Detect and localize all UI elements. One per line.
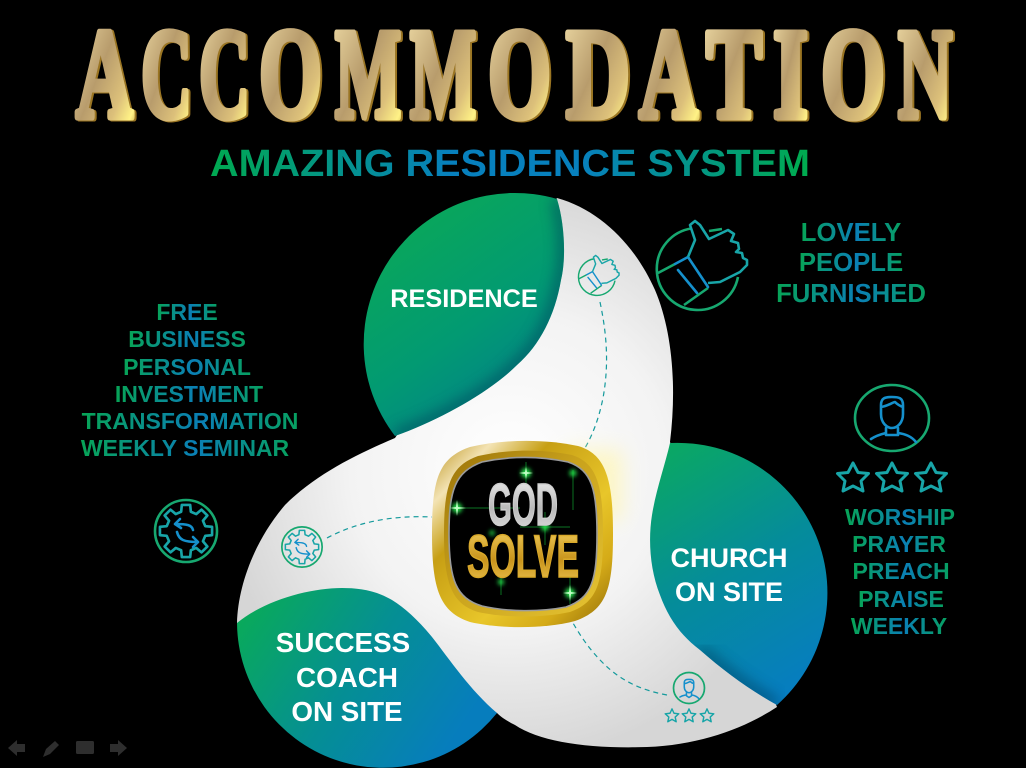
badge: god solve: SOLVE: [467, 523, 579, 590]
title: C: [141, 3, 192, 145]
icon: large person: [855, 385, 929, 451]
text block: free seminar list: WEEKLY SEMINAR: [81, 435, 290, 461]
title: A: [76, 3, 133, 145]
panel: success coach on site: [237, 588, 497, 768]
badge: god solve: GOD: [488, 472, 558, 538]
text block: worship list: PRAYER: [852, 531, 946, 557]
icon: menu box: [76, 741, 94, 754]
title: A: [639, 3, 698, 145]
text block: lovely people furnished: FURNISHED: [776, 280, 926, 308]
panel: success coach on site: SUCCESS: [276, 627, 410, 658]
title: O: [821, 3, 885, 145]
panel: church on site: CHURCH: [670, 543, 788, 573]
text block: worship list: PREACH: [852, 558, 950, 584]
icon: large gear: [155, 500, 217, 562]
title: N: [898, 3, 952, 145]
white trefoil shape: [237, 198, 777, 747]
title: I: [773, 3, 808, 145]
icon: small gear: [282, 527, 322, 567]
text block: lovely people furnished: LOVELY: [801, 219, 901, 247]
connector: thumb to badge: [585, 302, 607, 448]
text block: lovely people furnished: [776, 219, 926, 308]
text block: lovely people furnished: PEOPLE: [799, 249, 903, 277]
connector: gear to badge: [327, 517, 432, 538]
icon: small person rating: [665, 673, 714, 722]
panel: church on site: [650, 443, 827, 705]
text block: free seminar list: [81, 299, 298, 461]
icon: three stars: [838, 463, 946, 491]
title: [76, 3, 952, 145]
text block: free seminar list: BUSINESS: [128, 326, 246, 352]
subtitle: AMAZING RESIDENCE SYSTEM: [210, 143, 810, 185]
icon: small thumbs up: [578, 255, 619, 295]
title: M: [410, 3, 476, 145]
panel: residence: [364, 193, 564, 436]
panel: success coach on site: ON SITE: [291, 696, 403, 727]
title: M: [335, 3, 401, 145]
title: C: [199, 3, 250, 145]
panel: success coach on site: COACH: [296, 662, 398, 693]
title: T: [706, 3, 762, 145]
text block: free seminar list: INVESTMENT: [115, 381, 263, 407]
sparkles: [450, 462, 577, 604]
text block: worship list: WEEKLY: [851, 613, 947, 639]
icon: previous arrow: [8, 740, 25, 756]
text block: worship list: [845, 504, 955, 639]
panel: residence: RESIDENCE: [390, 285, 538, 313]
icon: next arrow: [110, 740, 127, 756]
title: O: [259, 3, 322, 145]
text block: free seminar list: FREE: [156, 299, 218, 325]
text block: free seminar list: PERSONAL: [123, 354, 251, 380]
diagram: trefoil: [237, 193, 827, 768]
title: O: [488, 3, 551, 145]
text block: free seminar list: TRANSFORMATION: [82, 408, 298, 434]
text block: worship list: PRAISE: [858, 586, 944, 612]
badge: god solve: [432, 441, 622, 627]
title: D: [566, 3, 630, 145]
connector: person to badge: [573, 623, 667, 695]
panel: church on site: ON SITE: [675, 577, 783, 607]
text block: worship list: WORSHIP: [845, 504, 955, 530]
icon: large thumbs up: [657, 221, 747, 310]
icon: pen: [43, 741, 59, 757]
navigation controls: [8, 740, 127, 757]
